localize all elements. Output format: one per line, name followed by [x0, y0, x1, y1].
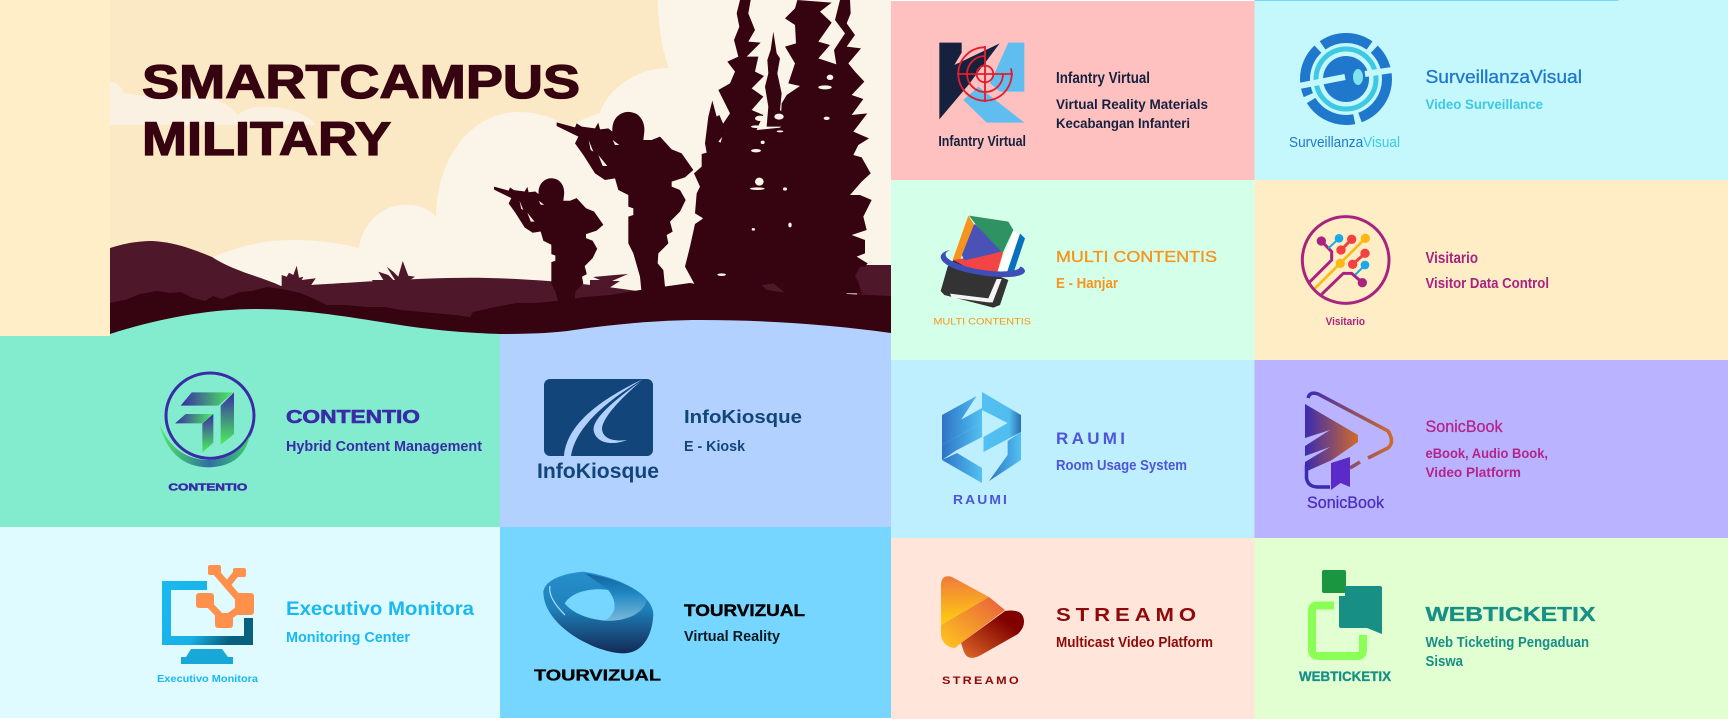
description line 2: Kecabangan Infanteri	[1056, 115, 1190, 131]
heading: CONTENTIO	[286, 407, 420, 427]
panel: streamo	[891, 538, 1254, 719]
description: Virtual Reality	[684, 629, 780, 645]
title	[142, 55, 580, 165]
trees silhouette	[680, 0, 891, 296]
logo: surveillanza visual	[1289, 38, 1400, 151]
description: Monitoring Center	[286, 630, 410, 646]
panel: executivo monitora	[0, 527, 500, 718]
logo: webticketix	[1299, 570, 1392, 684]
logo: sonicbook	[1305, 393, 1392, 512]
heading: RAUMI	[1056, 429, 1125, 448]
description: Video Surveillance	[1426, 96, 1543, 112]
description: eBook, Audio Book,	[1426, 445, 1548, 461]
logo: tourvizual	[534, 572, 661, 685]
logo: raumi	[942, 392, 1021, 507]
heading: STREAMO	[1056, 605, 1201, 625]
logo: sonicbook: SonicBook	[1307, 493, 1384, 512]
heading: SurveillanzaVisual	[1426, 67, 1582, 87]
panel: webticketix	[1254, 538, 1728, 719]
logo: contentio: CONTENTIO	[168, 483, 248, 494]
description: Multicast Video Platform	[1056, 635, 1213, 651]
panel: infokiosque	[500, 320, 891, 527]
description: Web Ticketing Pengaduan	[1426, 635, 1589, 651]
panel: tourvizual	[500, 527, 891, 718]
heading: WEBTICKETIX	[1426, 604, 1596, 626]
logo: infokiosque: InfoKiosque	[537, 460, 659, 483]
panel: surveillanza visual	[1254, 0, 1728, 180]
panel: visitario	[1254, 180, 1728, 360]
grass tufts	[282, 261, 628, 295]
heading: SonicBook	[1426, 417, 1503, 436]
logo: surveillanza visual: SurveillanzaVisual	[1289, 135, 1400, 151]
description: E - Kiosk	[684, 439, 746, 455]
logo: contentio	[159, 373, 254, 494]
heading: MULTI CONTENTIS	[1056, 249, 1217, 266]
logo: visitario: Visitario	[1326, 316, 1365, 328]
heading: Visitario	[1426, 250, 1478, 267]
logo: executivo monitora	[157, 565, 258, 685]
description: Visitor Data Control	[1426, 276, 1549, 292]
soldier: large	[557, 112, 693, 293]
description line 2: Video Platform	[1426, 464, 1521, 480]
panel: infantry virtual	[891, 1, 1254, 180]
logo: executivo monitora: Executivo Monitora	[157, 674, 258, 685]
logo: infantry virtual: Infantry Virtual	[938, 133, 1026, 150]
title: MILITARY	[142, 112, 391, 165]
logo: infokiosque	[537, 379, 659, 483]
description: E - Hanjar	[1056, 276, 1118, 292]
panel: hero illustration	[110, 0, 891, 340]
heading: Infantry Virtual	[1056, 70, 1150, 87]
panel: left cream band	[0, 0, 110, 336]
logo: multi contentis	[933, 216, 1031, 326]
logo: streamo	[941, 576, 1024, 687]
hills: back hill	[110, 241, 891, 340]
description: Hybrid Content Management	[286, 439, 482, 455]
panel: sonicbook	[1254, 360, 1728, 538]
title: SMARTCAMPUS	[142, 55, 580, 108]
panel: multi contentis	[891, 180, 1254, 360]
description: Room Usage System	[1056, 458, 1187, 474]
logo: webticketix: WEBTICKETIX	[1299, 668, 1392, 684]
heading: TOURVIZUAL	[684, 601, 805, 620]
heading: InfoKiosque	[684, 407, 802, 427]
description: Virtual Reality Materials	[1056, 96, 1208, 112]
ground silhouette	[110, 283, 891, 340]
logo: raumi: RAUMI	[953, 492, 1009, 507]
heading: Executivo Monitora	[286, 599, 474, 620]
logo: tourvizual: TOURVIZUAL	[534, 668, 661, 685]
panel: contentio	[0, 309, 500, 527]
logo: infantry virtual	[938, 43, 1026, 150]
logo: visitario	[1302, 217, 1389, 328]
description line 2: Siswa	[1426, 654, 1464, 670]
panel: raumi	[891, 360, 1254, 538]
soldier: small	[494, 178, 603, 334]
logo: multi contentis: MULTI CONTENTIS	[933, 316, 1031, 326]
logo: streamo: STREAMO	[942, 675, 1021, 687]
cloud: left small cloud	[110, 82, 316, 125]
